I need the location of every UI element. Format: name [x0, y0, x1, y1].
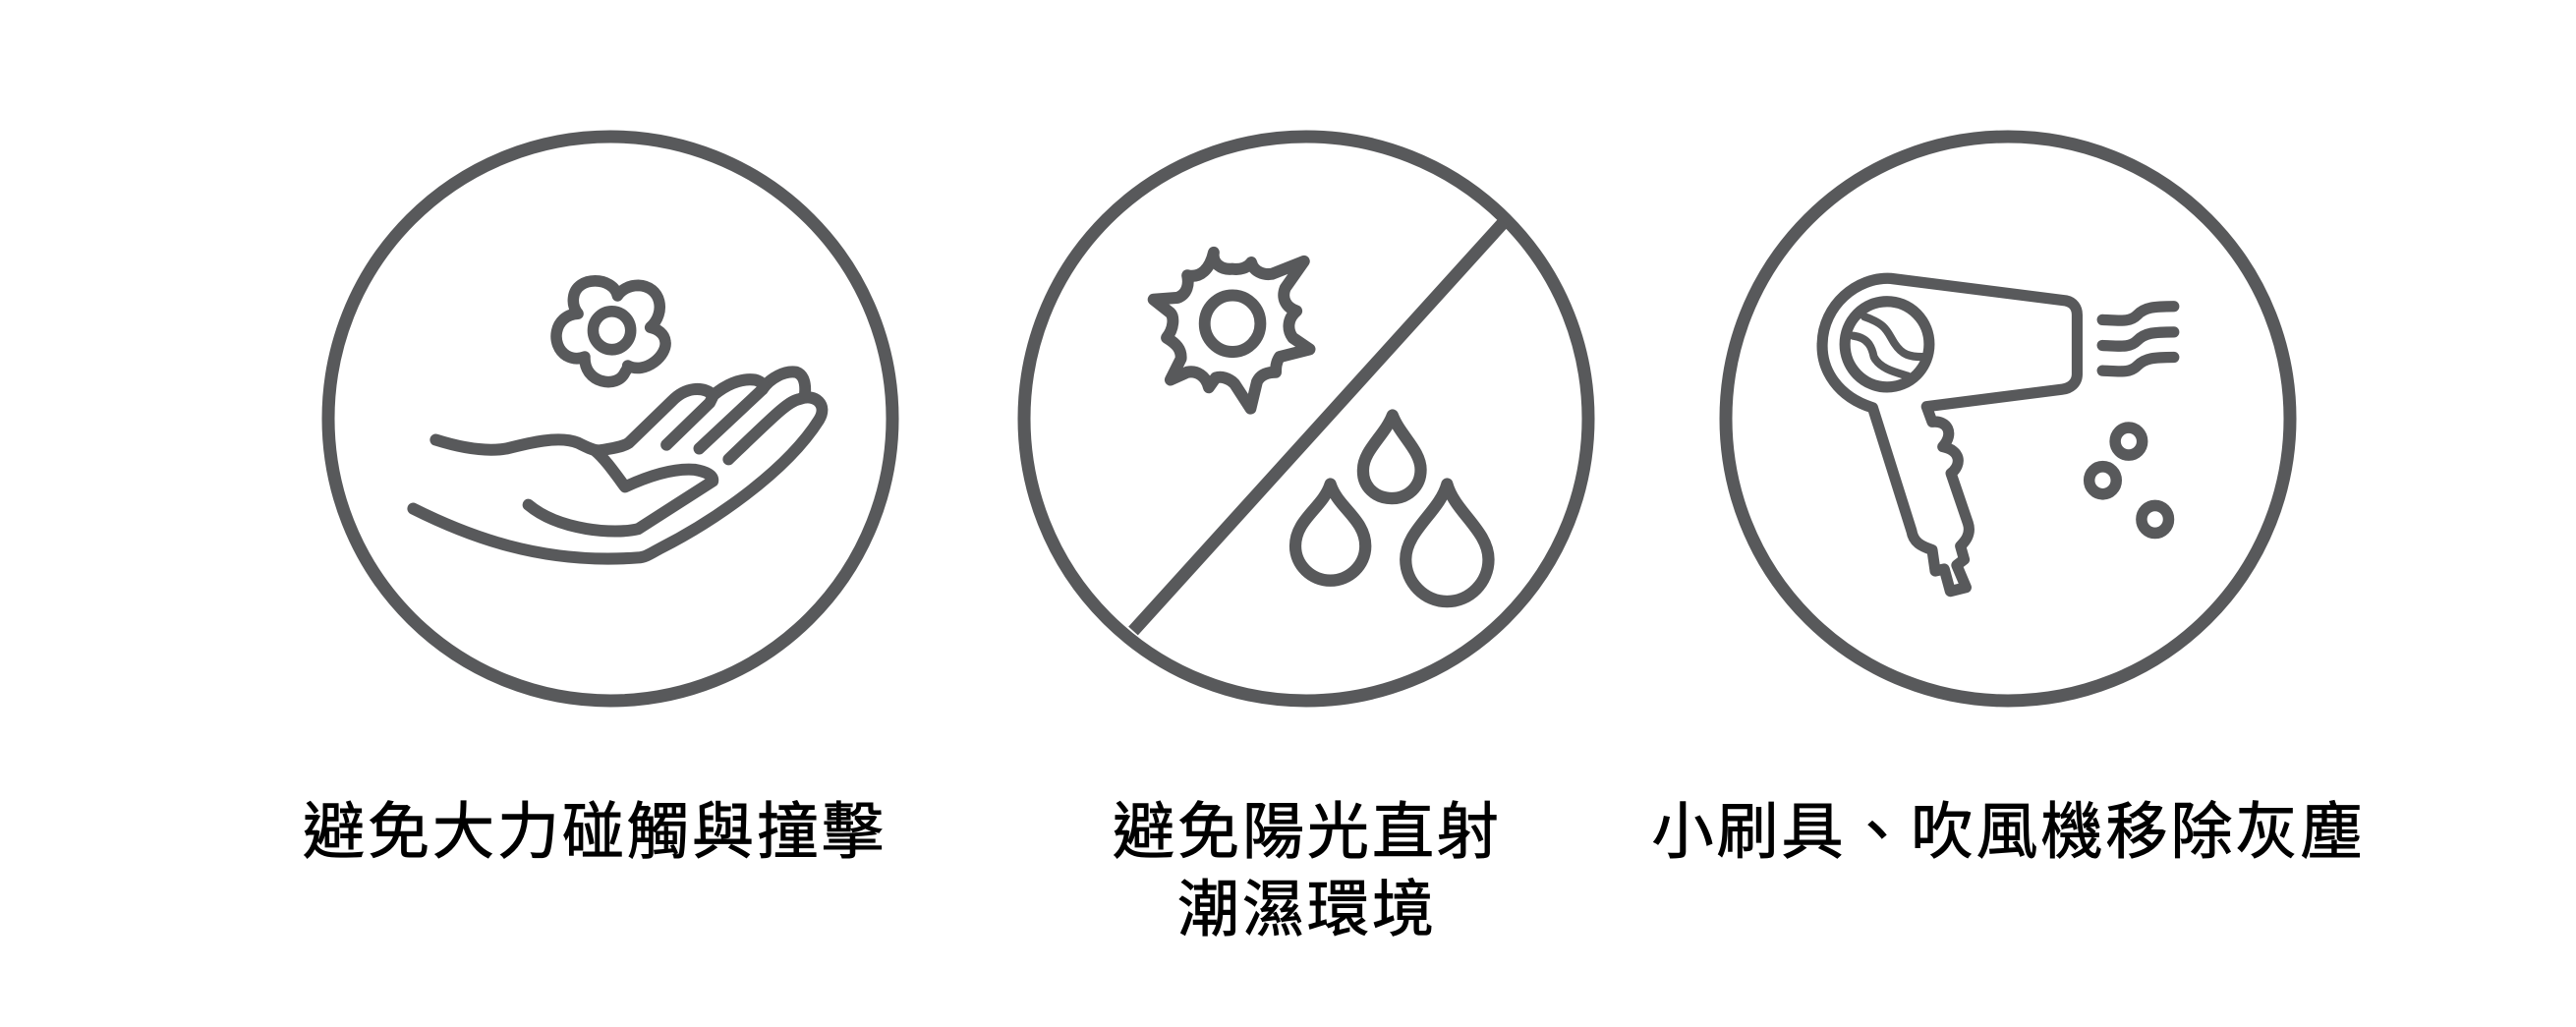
panel: remove dust — [1651, 137, 2365, 867]
icon: air flow — [2102, 307, 2174, 371]
icon: circle outline — [1726, 137, 2290, 701]
hand — [413, 371, 822, 559]
icon: hand holding flower — [413, 281, 822, 559]
label: humid environment: 潮濕環境 — [1177, 876, 1437, 944]
icon: circle outline with diagonal — [1024, 137, 1588, 701]
panel: avoid sun and damp — [1024, 137, 1588, 944]
flower — [556, 281, 665, 382]
icon: sun — [1154, 253, 1310, 409]
panel: avoid force and impact — [303, 137, 892, 867]
label: remove dust: 小刷具、吹風機移除灰塵 — [1651, 798, 2365, 867]
label: avoid sun and damp: 避免陽光直射 — [1113, 798, 1502, 867]
icon: circle outline — [328, 137, 892, 701]
label: avoid force and impact: 避免大力碰觸與撞擊 — [303, 798, 887, 867]
icon: dust particles — [2089, 428, 2168, 533]
icon: hair dryer — [1822, 278, 2077, 592]
icon: water drops — [1295, 416, 1488, 601]
